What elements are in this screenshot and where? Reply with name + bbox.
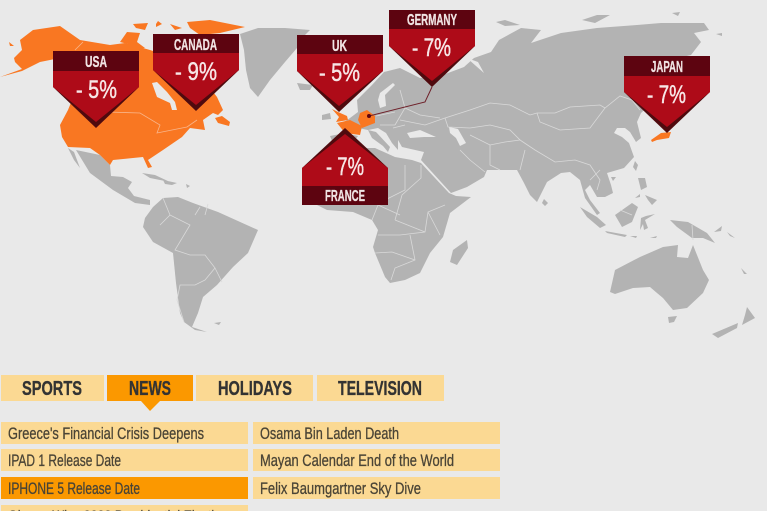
map: grey land	[68, 12, 755, 338]
item: Osama	[253, 422, 500, 444]
callout: UK	[297, 35, 383, 112]
France	[337, 120, 362, 135]
callout: USA	[53, 51, 139, 128]
tab: Sports: SPORTS	[22, 378, 82, 400]
event list	[1, 422, 500, 511]
map: inner borders of highlighted countries	[75, 42, 197, 133]
tab: Sports	[1, 375, 104, 401]
map: inland seas	[378, 58, 484, 146]
tab: Holidays: HOLIDAYS	[218, 378, 292, 400]
callout: France: FRANCE	[325, 188, 365, 205]
Hudson Bay	[152, 82, 177, 110]
callout: UK: - 5%	[319, 59, 360, 87]
item: IPHONE 5 (active): IPHONE 5 Release Date	[8, 479, 140, 498]
callout: France	[302, 128, 388, 205]
item: IPAD 1	[1, 449, 248, 471]
callout: Germany: GERMANY	[407, 12, 457, 29]
item: IPHONE 5 (active)	[1, 477, 248, 499]
tab: News (active)	[107, 375, 193, 411]
UK	[332, 109, 348, 122]
tab: Holidays	[196, 375, 313, 401]
item: Obama	[1, 505, 248, 511]
map: highlighted countries	[0, 20, 671, 168]
tab: News (active): NEWS	[129, 378, 171, 400]
item: Felix Baumgartner: Felix Baumgartner Sky Dive	[260, 479, 421, 498]
callout: France: - 7%	[326, 153, 364, 181]
tab: Television	[317, 375, 444, 401]
tab: Television: TELEVISION	[338, 378, 422, 400]
callout: USA: USA	[85, 54, 107, 71]
USA and Canada	[0, 26, 223, 168]
item: IPAD 1: IPAD 1 Release Date	[8, 451, 121, 470]
item: Greece: Greece's Financial Crisis Deepens	[8, 424, 204, 443]
category tabs	[1, 375, 444, 411]
callout: USA: - 5%	[76, 76, 117, 104]
callout: Germany	[389, 10, 475, 87]
item: Osama: Osama Bin Laden Death	[260, 424, 399, 443]
map: country borders	[160, 90, 693, 322]
connector line: Germany	[367, 87, 432, 118]
callout: Japan: JAPAN	[651, 59, 683, 76]
callout: Canada: CANADA	[174, 37, 217, 54]
item: Mayan Calendar: Mayan Calendar End of the World	[260, 451, 454, 470]
Germany	[358, 110, 375, 128]
callout: Japan	[624, 56, 710, 133]
callout: Japan: - 7%	[647, 81, 686, 109]
callout: UK: UK	[332, 38, 347, 55]
callout: Canada	[153, 34, 239, 111]
world map	[0, 12, 755, 338]
callout: Canada: - 9%	[175, 58, 217, 86]
callout: Germany: - 7%	[412, 34, 451, 62]
Japan	[651, 132, 671, 142]
